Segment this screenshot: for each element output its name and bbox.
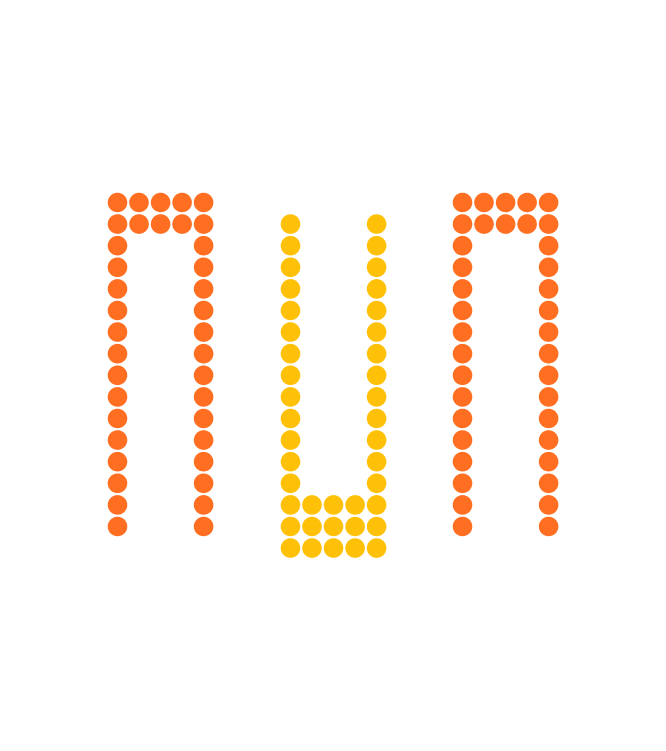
middle yellow dot column shape	[281, 214, 386, 558]
right orange dot column shape	[453, 193, 558, 536]
left orange dot column shape	[108, 193, 213, 536]
